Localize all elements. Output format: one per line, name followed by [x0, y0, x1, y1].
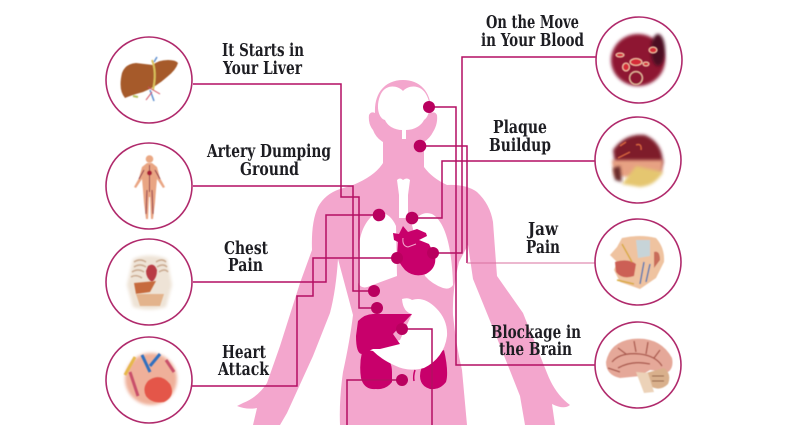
- label: Jaw Pain: Pain: [526, 238, 560, 258]
- label: It Starts in Your Liver: It Starts in: [222, 41, 304, 61]
- panel: liver circle: [106, 37, 192, 123]
- label: Jaw Pain: [526, 220, 560, 258]
- label: Blockage in the Brain: Blockage in: [491, 323, 581, 343]
- label: On the Move in Your Blood: On the Move: [486, 13, 579, 33]
- marker dots: [368, 101, 439, 386]
- label: Artery Dumping Ground: [206, 142, 331, 180]
- label: Heart Attack: [217, 343, 270, 380]
- trachea cutout: [397, 178, 410, 218]
- label: Heart Attack: Attack: [217, 360, 270, 380]
- icon: heart anatomy: [125, 353, 177, 405]
- panel: heart circle: [106, 337, 192, 423]
- label: Artery Dumping Ground: Ground: [240, 160, 299, 180]
- icon: blood cells: [611, 34, 665, 86]
- connector lines: [192, 57, 596, 425]
- kidneys: [360, 349, 447, 389]
- icon: human body with arteries: [134, 155, 165, 219]
- label: Chest Pain: [224, 239, 268, 276]
- label: Jaw Pain: Jaw: [526, 220, 559, 240]
- label: Plaque Buildup: Buildup: [489, 136, 551, 156]
- label: Blockage in the Brain: [491, 323, 581, 360]
- icon: brain: [606, 339, 672, 393]
- icon: liver: [121, 57, 178, 101]
- body silhouette: [237, 80, 570, 425]
- icon: rib cage: [127, 256, 172, 310]
- lungs cutout: [358, 213, 453, 289]
- panel: artery circle: [106, 143, 192, 229]
- icon: face anatomy: [610, 236, 664, 289]
- label: Plaque Buildup: [489, 118, 551, 156]
- small vessel marks: [386, 366, 415, 381]
- label: It Starts in Your Liver: Your Liver: [222, 59, 303, 79]
- panel: brain circle: [595, 322, 681, 408]
- label: It Starts in Your Liver: [222, 41, 304, 79]
- icon: artery plaque: [612, 135, 663, 187]
- label: On the Move in Your Blood: in Your Blood: [481, 31, 584, 51]
- stomach cutout: [368, 298, 447, 370]
- heart: [393, 226, 435, 275]
- label: On the Move in Your Blood: [481, 13, 584, 51]
- panel: chest circle: [106, 239, 192, 325]
- panel: jaw circle: [595, 219, 681, 305]
- label: Heart Attack: Heart: [222, 343, 266, 363]
- label: Artery Dumping Ground: Artery Dumping: [206, 142, 331, 162]
- liver: [356, 314, 412, 354]
- brain cutout: [378, 87, 429, 139]
- label: Plaque Buildup: Plaque: [493, 118, 547, 138]
- panel: plaque circle: [595, 117, 681, 203]
- panel: blood circle: [596, 17, 682, 103]
- label: Blockage in the Brain: the Brain: [499, 340, 572, 360]
- label: Chest Pain: Pain: [228, 256, 263, 276]
- label: Chest Pain: Chest: [224, 239, 268, 259]
